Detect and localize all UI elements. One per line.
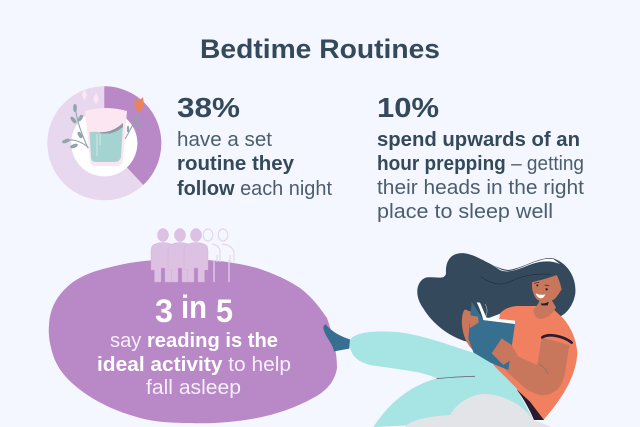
face [532,275,562,302]
hair [417,253,575,342]
back arm [462,309,478,352]
icon: glass of water [85,108,127,166]
stat: 38% [177,92,332,200]
book [468,302,515,370]
text: have a set routine: routine they [177,153,295,175]
back fingers [470,315,479,328]
callout blob: 3 in 5 [49,259,337,423]
stat: 38%: 38% [177,92,240,123]
callout text: say reading is the [110,330,278,352]
illustration: woman reading in bed [323,253,577,427]
smile [536,293,545,298]
text: spend upwards of an hour: their heads in the right [377,177,584,199]
text: have a set routine [177,129,332,200]
neck and shadow [533,300,556,319]
stat: 10%: 10% [377,92,439,123]
text: spend upwards of an hour: spend upwards of an [377,129,580,151]
callout text: 5 [216,293,233,329]
text: spend upwards of an hour: hour prepping – getting [377,153,584,175]
callout text [97,289,291,399]
donut chart: 38% have a routine [59,86,161,188]
icon: people, 3 of 5 filled [151,228,234,282]
text: spend upwards of an hour: place to sleep well [377,201,553,223]
eyes and brows [534,282,549,290]
callout text: fall asleep [146,377,241,399]
shirt [493,306,577,420]
stat: 10% [377,92,584,223]
sleeve line [542,335,572,343]
pants [350,331,533,427]
callout text: ideal activity to help [97,354,291,376]
text: spend upwards of an hour [377,129,584,223]
text: have a set routine: follow each night [177,178,332,200]
shirt hem [517,389,544,420]
title: Bedtime Routines [200,34,440,64]
front fingers [492,338,513,365]
text: have a set routine: have a set [177,129,272,151]
chin shadow [541,302,549,305]
icon: right sprig with flower [125,97,144,139]
front arm [492,337,569,395]
sock [323,325,350,351]
callout text: 3 [155,293,173,329]
cloud [405,394,552,427]
icon: left sprig [62,104,88,148]
elbow crease [538,364,548,374]
callout text: in [181,289,207,325]
icon: sparkles [82,89,99,105]
